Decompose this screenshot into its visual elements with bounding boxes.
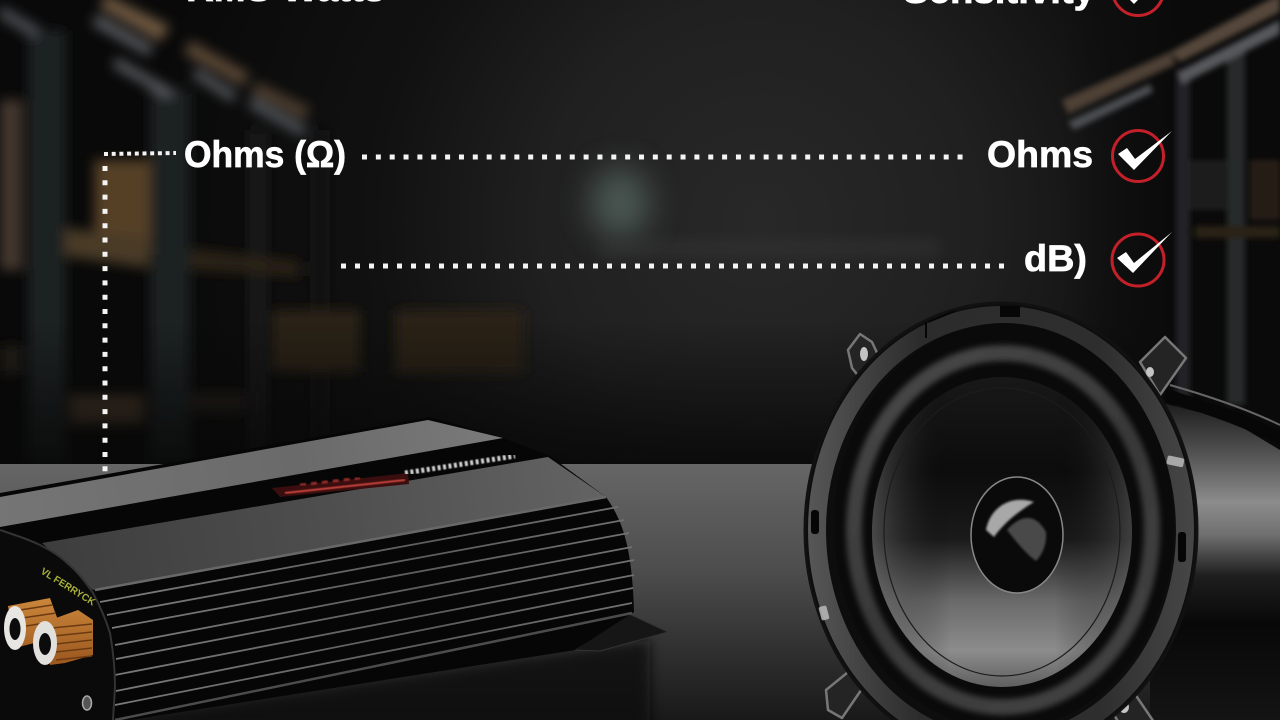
wall lower fade <box>0 320 1280 464</box>
copper terminal left <box>4 598 60 650</box>
ring metal band <box>817 315 1185 720</box>
amp shell <box>0 417 634 720</box>
screw <box>82 696 92 710</box>
cone inner ring <box>884 388 1120 676</box>
tab bolts <box>860 347 1154 713</box>
ring highlights <box>818 455 1185 621</box>
back top panel <box>0 420 503 527</box>
mounting flange <box>575 613 668 651</box>
base edge <box>115 613 632 720</box>
check icon: sensitivity top <box>1112 0 1172 16</box>
blurred central glow <box>590 167 650 239</box>
cable rim <box>1165 388 1280 445</box>
label: dB: dB) <box>1024 238 1087 279</box>
amplifier <box>0 420 666 720</box>
outer ring <box>805 303 1197 720</box>
speaker driver <box>804 302 1198 720</box>
surround highlight <box>854 353 1152 707</box>
tiny end-cap label: VL FERRYCK <box>38 566 97 609</box>
dotted connector: left vertical and small run <box>104 153 176 472</box>
table surface <box>0 464 1280 720</box>
cooling fins <box>100 507 634 705</box>
label: Ohms left: Ohms (Ω) <box>184 134 346 175</box>
check icon: dB <box>1112 232 1172 286</box>
background wall <box>0 0 1280 464</box>
mounting tabs <box>826 334 1186 720</box>
end cap <box>0 530 115 720</box>
label: Ohms right: Ohms <box>987 134 1093 175</box>
cone <box>872 377 1132 687</box>
copper terminal right <box>33 610 93 665</box>
front top panel <box>42 457 606 590</box>
white label marks <box>405 456 515 473</box>
cone side sheen <box>872 377 1132 687</box>
left blurred shelving <box>0 0 523 464</box>
faint wall light band <box>600 238 940 258</box>
table shadow under amp <box>120 640 650 720</box>
dust cap <box>971 477 1063 593</box>
surround base <box>834 323 1174 720</box>
right dark fade <box>1060 0 1280 464</box>
dotted connector: sensitivity <box>341 264 1010 268</box>
ring outer edge <box>805 303 1197 720</box>
check icon: ohms <box>1112 130 1172 182</box>
front panel lip <box>95 497 606 590</box>
red label <box>272 473 409 497</box>
cap highlight <box>986 500 1034 537</box>
right blurred shelving <box>1062 0 1280 405</box>
speaker cabinet body <box>1150 385 1280 720</box>
dotted connector: ohms <box>362 154 968 160</box>
ring slots <box>811 306 1186 562</box>
